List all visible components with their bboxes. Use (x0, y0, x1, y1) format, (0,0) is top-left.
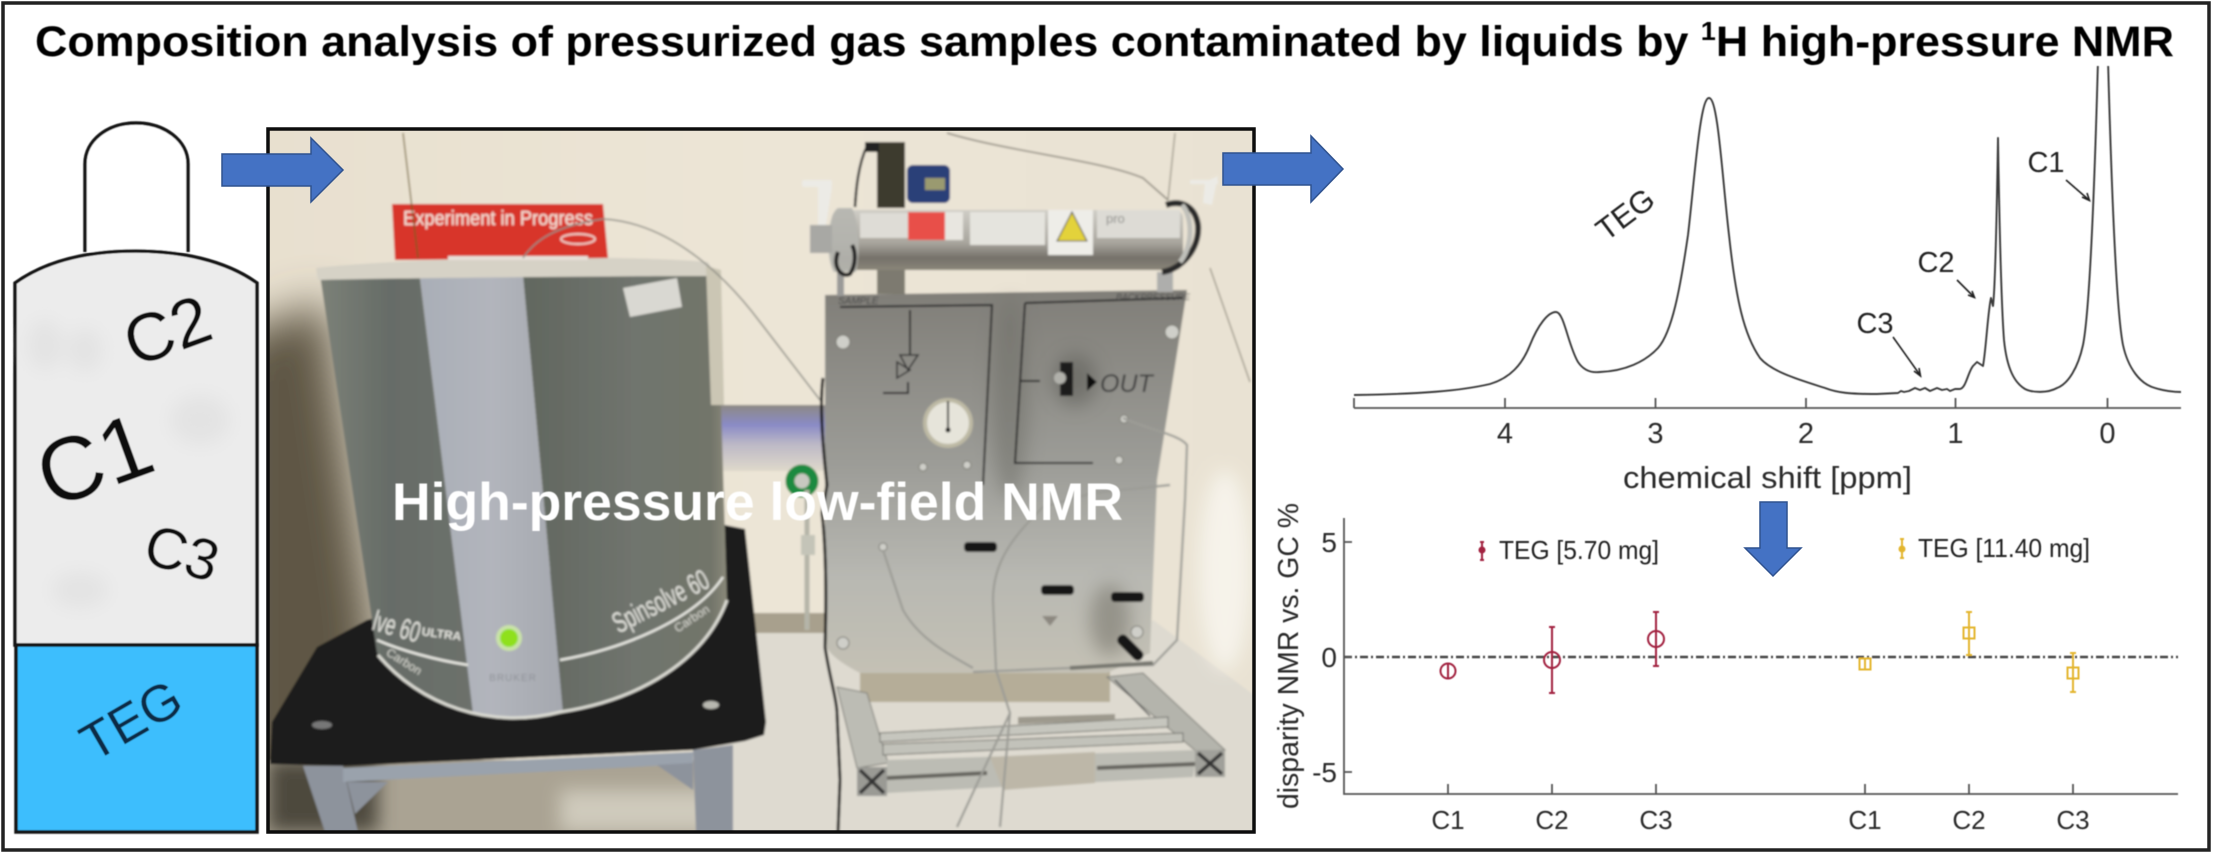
x axis title: chemical shift [ppm] (1623, 460, 1912, 495)
panel: photo of high-pressure NMR setup (230, 129, 1254, 855)
base frame rails (837, 672, 1225, 796)
peak arrows (1893, 180, 2090, 376)
arrow: photo to spectrum (1223, 136, 1343, 202)
magnet cylinder (316, 258, 727, 719)
liquid TEG layer (16, 645, 257, 832)
wall (270, 130, 1252, 761)
backpressure label: BACKPRESSURE (1116, 292, 1191, 302)
panel stains (992, 300, 1028, 500)
magnet brand text left: lve 60 (369, 605, 424, 649)
label C1: C1 (24, 394, 166, 528)
under table shade (268, 760, 728, 832)
valve symbol (897, 355, 918, 378)
cross bars (880, 717, 1168, 742)
title: Composition analysis of pressurized gas samples contaminated by liquids by (35, 18, 1622, 66)
green LED (496, 625, 522, 651)
x axis (1354, 398, 2181, 408)
red experiment sign (392, 204, 608, 260)
black valve knobs (964, 542, 1146, 663)
chart: disparity NMR vs GC (1273, 503, 2178, 835)
peak label TEG: TEG (1589, 181, 1661, 248)
marker lines (840, 298, 1183, 485)
x axis tick labels: 0 (2099, 418, 2116, 450)
peak label C3: C3 (1856, 308, 1894, 340)
desk (720, 620, 1254, 832)
bracket plate (990, 752, 1095, 790)
warning triangle (1057, 212, 1087, 241)
magnet top cap (316, 258, 714, 280)
legend: TEG 11.40 mg: TEG [11.40 mg] (1918, 533, 2090, 563)
spectrum trace (1354, 60, 2181, 395)
table top plate (270, 525, 766, 766)
series: TEG 11.40 mg (1860, 612, 2078, 692)
x tick labels: C1 (1431, 805, 1465, 835)
x axis tick labels: 3 (1647, 418, 1664, 450)
out valve knob (1060, 362, 1073, 396)
label C2: C2 (113, 280, 221, 382)
title: H high-pressure NMR (1716, 18, 2174, 66)
photo overlay label: High-pressure low-field NMR (392, 473, 1123, 532)
magnet centre band (420, 276, 563, 719)
panel: gas cylinder (15, 123, 257, 832)
x tick labels: C2 (1535, 805, 1569, 835)
magnet brand text right: Spinsolve 60 (607, 564, 715, 640)
sign logo (561, 234, 595, 244)
shelf (718, 405, 826, 471)
black cable (822, 378, 840, 832)
chart axes (1344, 518, 2178, 794)
magnet logo: BRUKER (489, 673, 537, 684)
magnet white stripes (377, 577, 723, 665)
side rails (837, 687, 888, 768)
front rail (887, 750, 1197, 793)
y tick labels: 0 (1321, 642, 1337, 673)
magnet ultra label: ULTRA (421, 624, 463, 644)
white mounts (802, 176, 1218, 253)
sticker (623, 278, 682, 317)
rail ends (857, 767, 887, 796)
pressure gauge (925, 400, 971, 446)
chart: NMR spectrum (1354, 60, 2181, 495)
right wall highlight (1199, 470, 1251, 670)
photo border (268, 129, 1254, 832)
out label: OUT (1100, 370, 1154, 398)
gas mottling (27, 320, 230, 608)
cylinder gas body (15, 251, 257, 645)
x axis tick labels: 4 (1497, 418, 1513, 450)
pressure sensor and display (855, 142, 950, 208)
peak label C1: C1 (2027, 147, 2065, 179)
x axis tick labels: 2 (1798, 418, 1814, 450)
arrow: cylinder to photo (222, 138, 343, 202)
x tick labels: C2 (1952, 805, 1986, 835)
left wall shadow (270, 278, 373, 762)
series: TEG 5.70 mg (1440, 612, 1664, 693)
screws (836, 325, 1179, 649)
y tick labels: 5 (1321, 527, 1337, 558)
magnet left panel (320, 275, 473, 713)
label C3: C3 (137, 512, 226, 595)
photo content (230, 129, 1254, 855)
posts under tube (877, 268, 905, 294)
x axis tick labels (1497, 418, 2116, 450)
y axis title: disparity NMR vs. GC % (1273, 503, 1305, 809)
y tick labels: -5 (1312, 757, 1337, 788)
x axis tick labels: 1 (1947, 418, 1964, 450)
magnet carbon right: Carbon (672, 602, 712, 635)
title: 1 (1701, 16, 1716, 46)
magnet carbon left: Carbon (384, 645, 425, 678)
cylinder neck (85, 123, 188, 252)
arrow: spectrum to chart (1745, 502, 1801, 576)
legend: TEG 5.70 mg: TEG [5.70 mg] (1499, 535, 1659, 565)
peak label C2: C2 (1917, 247, 1955, 279)
y tick labels (1312, 527, 1337, 788)
x tick labels: C3 (2056, 805, 2090, 835)
shadow under panel (860, 672, 1110, 702)
skirting (752, 612, 826, 634)
sign text: Experiment in Progress (403, 208, 593, 230)
zero reference line (1344, 656, 2178, 658)
x tick labels: C1 (1848, 805, 1882, 835)
x tick labels: C3 (1639, 805, 1673, 835)
green port (790, 469, 815, 630)
tube labels (860, 213, 908, 238)
thin wires on wall (403, 133, 418, 258)
clamps (828, 208, 859, 272)
table legs (303, 745, 733, 832)
tube brand: pro (1106, 211, 1125, 226)
sample label: SAMPLE (838, 296, 879, 307)
pressure cylinder tube (828, 203, 1198, 275)
capillary tubing on panel (883, 418, 1187, 827)
magnet right panel (523, 272, 727, 712)
x tick labels (1431, 805, 2090, 835)
metal valve panel (825, 290, 1191, 673)
label TEG: TEG (71, 669, 192, 773)
